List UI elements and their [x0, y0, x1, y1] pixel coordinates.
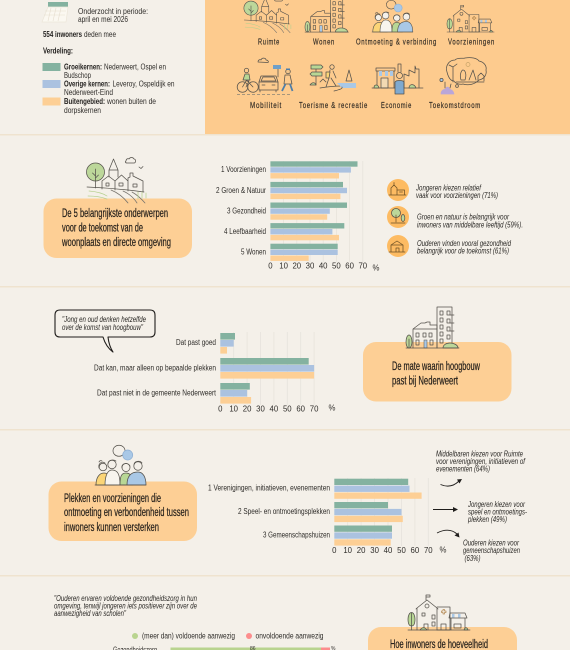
bar chart: top 5 onderwerpen: 40	[319, 262, 328, 270]
callout: gezondheid: Ouderen vinden vooral gezondheid	[417, 239, 512, 248]
icon: toekomstdroom	[440, 58, 486, 94]
bar chart: top 5 onderwerpen: 2 Groen & Natuur	[216, 186, 266, 195]
bar chart: top 5 onderwerpen: 0	[268, 262, 273, 270]
quote: gezondheidszorg: "Ouderen ervaren voldoende gezondheidszorg in hun	[54, 594, 197, 603]
bar chart: top 5 onderwerpen	[216, 161, 380, 272]
icon: people talking	[95, 445, 146, 485]
bar chart: top 5 onderwerpen: 30	[306, 262, 315, 270]
panel: top 5 heading box: De 5 belangrijkste onderwerpen	[62, 208, 168, 220]
bar chart: hoogbouw: 0	[218, 404, 223, 414]
bar chart: ontmoeting: 30	[370, 546, 380, 555]
theme labels: Voorzieningen	[448, 36, 495, 46]
bar chart: top 5 onderwerpen: 5 Wonen	[241, 248, 266, 256]
bar chart: ontmoeting: 3 Gemeenschapshuizen	[263, 530, 330, 540]
callout: ouderen: (63%)	[464, 554, 481, 563]
legend: Budschop	[64, 71, 92, 80]
icon: voorzieningen	[447, 5, 494, 32]
panel: hoogbouw heading box: past bij Nederweert	[392, 376, 459, 388]
panel: ontmoeting heading box	[48, 482, 197, 541]
section divider 4	[0, 575, 570, 576]
callout: ouderen: Ouderen kiezen voor	[463, 538, 519, 548]
theme labels	[250, 36, 495, 110]
callout: jongeren: plekken (49%)	[467, 515, 507, 524]
bar chart: hoogbouw: %	[329, 404, 336, 412]
callout: jongeren	[467, 500, 527, 524]
study period: april en mei 2026	[78, 15, 128, 24]
panel: aanwezigheid heading box	[368, 627, 517, 650]
legend: Nederweert, Ospel en	[104, 62, 166, 72]
bar chart: hoogbouw: 20	[243, 404, 252, 414]
bar chart: ontmoeting: 2 Speel- en ontmoetingsplekken	[238, 507, 330, 516]
legend: wonen buiten de	[106, 97, 156, 106]
panel: top 5 heading box: voor de toekomst van de	[62, 222, 143, 234]
bar chart: hoogbouw: Dat kan, maar alleen op bepaalde plekken	[94, 364, 216, 372]
callout: groen en natuur	[387, 206, 523, 230]
legend: Nederweert-Eind	[64, 88, 113, 97]
bar chart: top 5 onderwerpen: 60	[345, 262, 355, 270]
bar chart: top 5 onderwerpen: 50	[332, 262, 341, 270]
panel: ontmoeting heading box: ontmoeting en verbondenheid tussen	[64, 507, 189, 519]
section divider 2	[0, 286, 570, 288]
icon: wonen	[305, 0, 348, 32]
bar chart: ontmoeting: 70	[424, 546, 433, 555]
panel: top 5 heading box	[44, 198, 192, 258]
panel: top 5 heading box: woonplaats en directe omgeving	[61, 237, 171, 249]
bar chart: top 5 onderwerpen: 1 Voorzieningen	[221, 165, 266, 174]
bar chart: ontmoeting: 60	[411, 546, 420, 555]
callout: jongeren: speel en ontmoetings-	[468, 508, 527, 516]
bar chart: hoogbouw: Dat past niet in de gemeente Nederweert	[97, 388, 217, 398]
icon: ontmoeting	[372, 0, 413, 32]
panel: themes	[205, 0, 570, 134]
arrow: jongeren	[433, 507, 458, 512]
icon: houses and tower	[406, 307, 459, 348]
legend: Groeikernen:	[64, 62, 102, 72]
section divider 3	[0, 429, 570, 430]
bar chart: top 5 onderwerpen: 20	[292, 262, 302, 270]
bar chart: hoogbouw: Dat past goed	[176, 338, 216, 347]
callout: groen en natuur: inwoners van middelbare leeftijd (59%).	[417, 220, 523, 230]
theme labels: Wonen	[313, 36, 335, 46]
icon: calendar	[42, 2, 68, 22]
respondents: deden mee	[84, 30, 116, 39]
speech bubble: hoogbouw	[55, 310, 155, 352]
theme labels: Toerisme & recreatie	[299, 100, 368, 110]
legend: dorpskernen	[64, 106, 101, 115]
callout: groen en natuur: Groen en natuur is belangrijk voor	[417, 212, 509, 222]
theme labels: Ontmoeting & verbinding	[356, 36, 437, 46]
bar chart: top 5 onderwerpen: 3 Gezondheid	[227, 206, 266, 216]
respondents: 554 inwoners	[43, 30, 83, 39]
legend: aanwezigheid: onvoldoende aanwezig	[256, 632, 324, 640]
callout: middelbaren: Middelbaren kiezen voor Ruimte	[436, 450, 524, 458]
bar chart: ontmoeting: 1 Verenigingen, initiatieven, evenementen	[208, 484, 330, 492]
theme labels: Mobiliteit	[250, 100, 282, 110]
arrow: ouderen	[437, 530, 460, 538]
bar chart: hoogbouw: 40	[270, 404, 279, 414]
respondents	[43, 30, 116, 39]
bar chart: ontmoeting: %	[440, 546, 447, 554]
legend: aanwezigheid: (meer dan) voldoende aanwezig	[142, 632, 235, 640]
theme labels: Ruimte	[258, 36, 280, 46]
icon: ruimte	[244, 0, 291, 33]
panel: ontmoeting heading box: Plekken en voorzieningen die	[64, 493, 161, 505]
quote: gezondheidszorg	[54, 594, 198, 618]
left intro background	[0, 0, 205, 134]
icon: toerisme	[310, 65, 356, 91]
stacked bar chart: aanwezigheid	[113, 646, 336, 650]
legend heading: Verdeling:	[43, 46, 73, 56]
legend: Buitengebied:	[64, 97, 105, 106]
icon: mobiliteit	[237, 58, 292, 94]
bar chart: top 5 onderwerpen: %	[373, 264, 380, 272]
icon: village	[86, 158, 146, 203]
callout: voorzieningen: vaak voor voorzieningen (71%)	[416, 191, 498, 200]
section divider 1	[0, 134, 570, 136]
study period: Onderzocht in periode:	[78, 7, 148, 16]
study period	[78, 7, 148, 24]
bar chart: hoogbouw: 30	[256, 404, 265, 414]
arrow: middelbaren	[440, 479, 462, 486]
legend: Overige kernen:	[64, 80, 110, 88]
legend: aanwezigheid	[132, 632, 324, 640]
panel: hoogbouw heading box: De mate waarin hoogbouw	[392, 361, 480, 373]
legend	[42, 62, 174, 115]
bar chart: ontmoeting: 20	[357, 546, 366, 555]
callout: middelbaren	[436, 450, 526, 474]
speech bubble: hoogbouw: over de komst van hoogbouw"	[62, 323, 144, 332]
callout: middelbaren: voor verenigingen, initiatieven of	[436, 457, 526, 466]
bar chart: hoogbouw: 70	[310, 404, 319, 414]
bar chart: ontmoeting: 40	[384, 546, 393, 555]
bar chart: hoogbouw: 10	[229, 404, 239, 414]
panel: ontmoeting heading box: inwoners kunnen versterken	[64, 522, 159, 534]
quote: gezondheidszorg: omgeving, tenwijl jongeren iets positiever zijn over de	[54, 602, 198, 610]
legend: Leveroy, Ospeldijk en	[112, 80, 174, 88]
panel: hoogbouw heading box	[363, 342, 512, 402]
bar chart: hoogbouw: 50	[283, 404, 292, 414]
icon: school and shops	[408, 595, 470, 630]
theme labels: Economie	[381, 100, 412, 110]
icon: economie	[372, 64, 423, 94]
quote: gezondheidszorg: aanwezigheid van scholen"	[54, 609, 127, 618]
callout: jongeren: Jongeren kiezen voor	[467, 500, 525, 509]
theme labels: Toekomstdroom	[429, 100, 481, 110]
bar chart: top 5 onderwerpen: 70	[358, 262, 368, 270]
callout: gezondheid	[387, 235, 512, 257]
bar chart: ontmoeting: 0	[332, 546, 337, 555]
speech bubble: hoogbouw: "Jong en oud denken hetzelfde	[62, 315, 147, 324]
callout: middelbaren: evenementen (64%)	[436, 464, 490, 474]
callout: voorzieningen	[387, 179, 498, 201]
bar chart: top 5 onderwerpen: 4 Leefbaarheid	[224, 227, 266, 236]
callout: ouderen	[463, 538, 520, 563]
callout: ouderen: gemeenschapshuizen	[463, 546, 520, 555]
bar chart: hoogbouw	[94, 332, 336, 414]
callout: gezondheid: belangrijk voor de toekomst (61%)	[417, 246, 509, 256]
callout: voorzieningen: Jongeren kiezen relatief	[415, 184, 482, 192]
bar chart: hoogbouw: 60	[296, 404, 306, 414]
bar chart: ontmoeting: 10	[343, 546, 353, 555]
bar chart: ontmoeting: 50	[397, 546, 406, 555]
bar chart: top 5 onderwerpen: 10	[279, 262, 289, 270]
bar chart: ontmoeting	[208, 478, 447, 555]
